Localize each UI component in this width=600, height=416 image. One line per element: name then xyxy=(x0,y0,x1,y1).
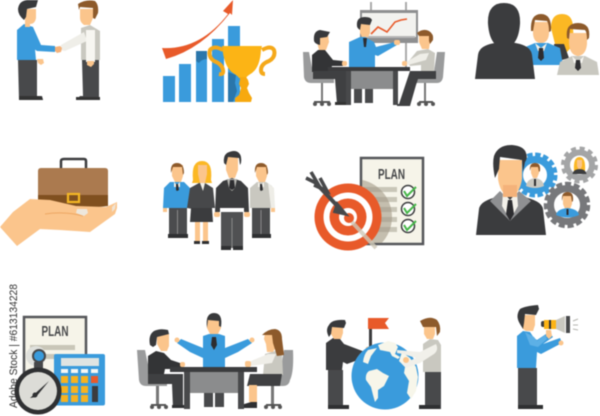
person: right man xyxy=(397,318,441,409)
person: grey vest xyxy=(250,163,275,238)
icon: business team xyxy=(163,151,275,250)
icon: round table meeting xyxy=(137,313,293,409)
icon: dark grey gear with man xyxy=(546,184,588,226)
person: woman xyxy=(187,161,215,244)
person: left man xyxy=(326,320,370,409)
icon: calculator xyxy=(54,354,105,406)
icon: global business with flag xyxy=(326,318,441,410)
person: blue sweater xyxy=(163,163,190,238)
icon: target and plan checklist: PLAN xyxy=(378,166,405,183)
icon: globe xyxy=(352,341,418,410)
icon: handshake xyxy=(17,0,100,100)
person: man in dark suit xyxy=(214,151,250,250)
icon: megaphone xyxy=(541,316,578,333)
icon: grey gear with woman xyxy=(563,148,596,182)
icon: hand holding briefcase xyxy=(0,159,117,246)
icon: manager with gears xyxy=(476,145,596,235)
icon: man with megaphone xyxy=(517,305,578,409)
icon: blue gear with man xyxy=(514,154,556,196)
icon: target and plan checklist xyxy=(306,158,423,255)
icon: stopwatch xyxy=(14,346,62,414)
icon: growth chart and trophy xyxy=(162,0,274,102)
icon: flag xyxy=(368,318,389,348)
icon: plan, calculator and stopwatch xyxy=(14,317,105,414)
person: manager xyxy=(476,145,546,235)
icon: boss facing team xyxy=(475,3,599,79)
document: plan sheet: PLAN xyxy=(42,324,68,340)
watermark id: Adobe Stock | #613134228 xyxy=(8,284,20,408)
icon: presentation meeting xyxy=(303,2,445,106)
